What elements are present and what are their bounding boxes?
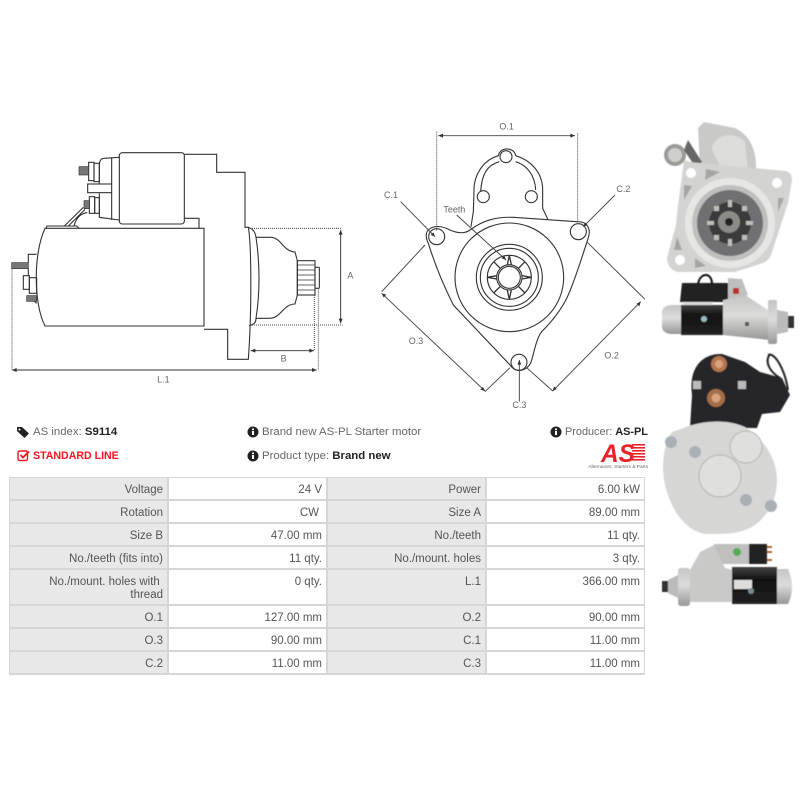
icon: info — [550, 426, 562, 438]
specification table: 90.00 mm — [589, 612, 640, 624]
diagram: front view with mounting holes: O.3 — [409, 336, 423, 346]
specification table: No./mount. holes — [394, 552, 481, 564]
specification table: 127.00 mm — [264, 612, 322, 624]
specification table: 11.00 mm — [590, 634, 640, 646]
info row: producer: Producer: AS-PL — [565, 426, 648, 438]
specification table: 11 qty. — [607, 530, 640, 542]
diagram: front view with mounting holes: O.1 — [499, 122, 514, 132]
specification table — [9, 477, 645, 675]
dimension lines — [437, 132, 578, 232]
specification table: 90.00 mm — [271, 634, 322, 646]
specification table: Rotation — [120, 506, 163, 518]
specification table: O.2 — [462, 612, 481, 624]
specification table: C.2 — [145, 658, 163, 670]
info row: description: Brand new AS-PL Starter motor — [262, 426, 421, 438]
specification table: CW — [300, 506, 319, 518]
icon: tags — [17, 427, 29, 438]
diagram: front view with mounting holes: Teeth — [443, 205, 465, 215]
specification table: Voltage — [125, 484, 163, 496]
icon: info — [248, 426, 258, 438]
specification table: Size B — [130, 530, 163, 542]
info row: standard line: STANDARD LINE — [33, 450, 119, 462]
specification table: C.1 — [463, 634, 481, 646]
icon: info — [248, 450, 258, 462]
specification table: thread — [130, 589, 163, 601]
diagram: front view with mounting holes: O.2 — [604, 351, 619, 361]
specification table: Size A — [448, 506, 481, 518]
specification table: 3 qty. — [613, 552, 640, 564]
specification table: No./teeth — [434, 530, 481, 542]
diagram: front view with mounting holes: C.1 — [384, 190, 398, 200]
specification table: 89.00 mm — [589, 506, 640, 518]
diagram: front view with mounting holes: C.3 — [512, 400, 526, 410]
specification table: 6.00 kW — [598, 484, 640, 496]
info row: AS index: AS index: S9114 — [33, 426, 117, 438]
specification table: 11.00 mm — [272, 658, 322, 670]
info row: product type: Product type: Brand new — [262, 450, 391, 462]
specification table: L.1 — [465, 576, 481, 588]
logo: AS-PL: Alternators, Starters & Parts — [588, 464, 649, 470]
specification table: 366.00 mm — [582, 576, 640, 588]
dimension lines — [12, 228, 343, 370]
specification table: O.3 — [144, 634, 163, 646]
specification table: 0 qty. — [295, 576, 322, 588]
diagram: side view of starter motor: B — [281, 353, 287, 363]
specification table: O.1 — [144, 612, 163, 624]
specification table: No./teeth (fits into) — [69, 552, 163, 564]
logo: AS-PL — [588, 442, 649, 470]
specification table: No./mount. holes with — [49, 576, 160, 588]
diagram: side view of starter motor: A — [347, 271, 353, 281]
diagram: front view with mounting holes: C.2 — [616, 184, 630, 194]
specification table: 24 V — [298, 484, 322, 496]
specification table: 11.00 mm — [590, 658, 640, 670]
specification table: 47.00 mm — [271, 530, 322, 542]
icon: checkbox — [17, 450, 30, 462]
specification table: 11 qty. — [289, 552, 322, 564]
specification table: Power — [448, 484, 481, 496]
diagram: side view of starter motor: L.1 — [157, 374, 170, 384]
specification table: C.3 — [463, 658, 481, 670]
